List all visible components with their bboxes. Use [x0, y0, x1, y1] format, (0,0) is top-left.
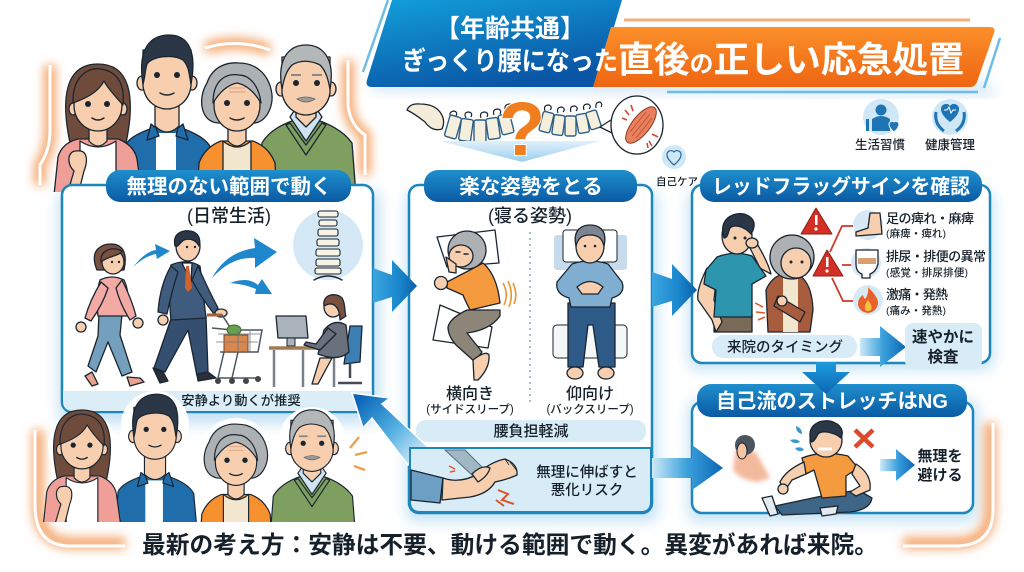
top family illustration: [54, 35, 356, 195]
risk text: [536, 464, 638, 499]
question mark: ?: [499, 87, 545, 172]
arrow: panel 1 to panel 2: [373, 260, 417, 312]
background haze: [58, 70, 1000, 522]
icon: muscle callout: [600, 96, 663, 154]
heading pill: [106, 170, 351, 202]
footer band: [63, 391, 372, 411]
icon: lifestyle: [855, 99, 905, 152]
triangle pointer: [440, 141, 600, 162]
heading pill: [424, 170, 637, 202]
stretching man: [762, 421, 872, 516]
avoid text: 避ける: [917, 466, 963, 484]
back sleep figure: [553, 225, 627, 379]
panel: red flag signs: [692, 170, 990, 369]
woman walking: [76, 244, 144, 386]
arrow: panel 2 to panel 3: [652, 264, 697, 316]
panel: comfortable posture: (サイドスリープ): [426, 403, 514, 416]
faded back pain figure: [733, 435, 770, 482]
icon: foot: [853, 210, 883, 240]
icon: toilet: [851, 248, 881, 278]
examine box: 速やかに: [912, 328, 974, 346]
man with shopping cart: [153, 231, 227, 383]
man and elderly woman: [698, 214, 814, 332]
arrow: red flag down to NG: [802, 362, 850, 394]
panel: self stretching NG: [692, 384, 973, 516]
symptom list: (麻痺・痺れ): [886, 227, 946, 240]
load reduction band: 腰負担軽減: [493, 423, 569, 440]
symptom list: 足の痺れ・麻痺: [886, 211, 974, 226]
panel: move within range: [62, 170, 373, 412]
visit timing pill: [712, 335, 857, 358]
arrow: back to panel 1: [352, 393, 428, 465]
title text: 【年齢共通】: [435, 15, 585, 43]
stretched foot illustration: [411, 450, 517, 506]
examine box: [905, 323, 982, 369]
symptom list: (痛み・発熱): [886, 304, 946, 317]
panel: comfortable posture: 仰向け: [566, 385, 614, 403]
label: 健康管理: [925, 137, 975, 152]
sweat drops: [790, 426, 804, 451]
accent strokes: [350, 437, 367, 470]
heading pill: [697, 384, 967, 417]
icon: flame: [853, 285, 883, 315]
arrow: risk to NG panel: [652, 445, 723, 490]
bottom summary text: 最新の考え方：安静は不要、動ける範囲で動く。異変があれば来院。: [142, 531, 878, 559]
red connectors: [830, 226, 853, 301]
title banner: 直後の正しい応急処置: [618, 39, 964, 80]
arrows in panel: [133, 238, 277, 294]
visit timing pill: 来院のタイミング: [727, 339, 843, 356]
subheading: (寝る姿勢): [488, 206, 572, 226]
title banner: [363, 0, 1000, 92]
load reduction band: [416, 420, 646, 442]
icon: red X: [855, 430, 873, 447]
symptom list: (感覚・排尿排便): [886, 266, 968, 279]
labels: 横向き: [446, 385, 494, 403]
woman at desk: [269, 295, 362, 387]
icon: health management: [925, 99, 975, 152]
symptom list: 激痛・発熱: [886, 287, 948, 302]
dotted divider: [529, 232, 531, 402]
bottom family illustration: [43, 391, 356, 522]
warning triangles: [801, 208, 843, 276]
title banner: ぎっくり腰になった: [402, 46, 618, 76]
examine box: 検査: [927, 347, 959, 366]
icon: self care heart: [656, 145, 698, 188]
heading pill: 楽な姿勢をとる: [459, 176, 603, 198]
arrow to examine: [860, 326, 906, 367]
panel: risk band: [410, 448, 651, 512]
heading pill: 自己流のストレッチはNG: [716, 390, 948, 413]
arrow avoid: [880, 449, 915, 481]
label: 生活習慣: [855, 137, 905, 152]
avoid text: [917, 448, 963, 484]
heading pill: 無理のない範囲で動く: [126, 176, 332, 198]
symptom list: 排尿・排便の異常: [886, 249, 986, 264]
footer band: 安静より動くが推奨: [181, 392, 301, 408]
spine icon: [293, 210, 363, 280]
heading pill: [700, 170, 982, 202]
panel: comfortable posture: (バックスリープ): [546, 403, 634, 416]
risk text: 無理に伸ばすと: [536, 464, 638, 481]
panel: comfortable posture: [409, 170, 652, 513]
spine with question mark: [407, 87, 602, 172]
heading pill: レッドフラッグサインを確認: [712, 174, 970, 198]
subheading: (日常生活): [187, 206, 271, 226]
symptom list: [886, 211, 986, 317]
shopping cart: [207, 315, 262, 384]
side sleep figure: [433, 230, 516, 380]
avoid text: 無理を: [917, 448, 963, 465]
label: 自己ケア: [656, 175, 698, 188]
risk text: 悪化リスク: [551, 482, 623, 499]
